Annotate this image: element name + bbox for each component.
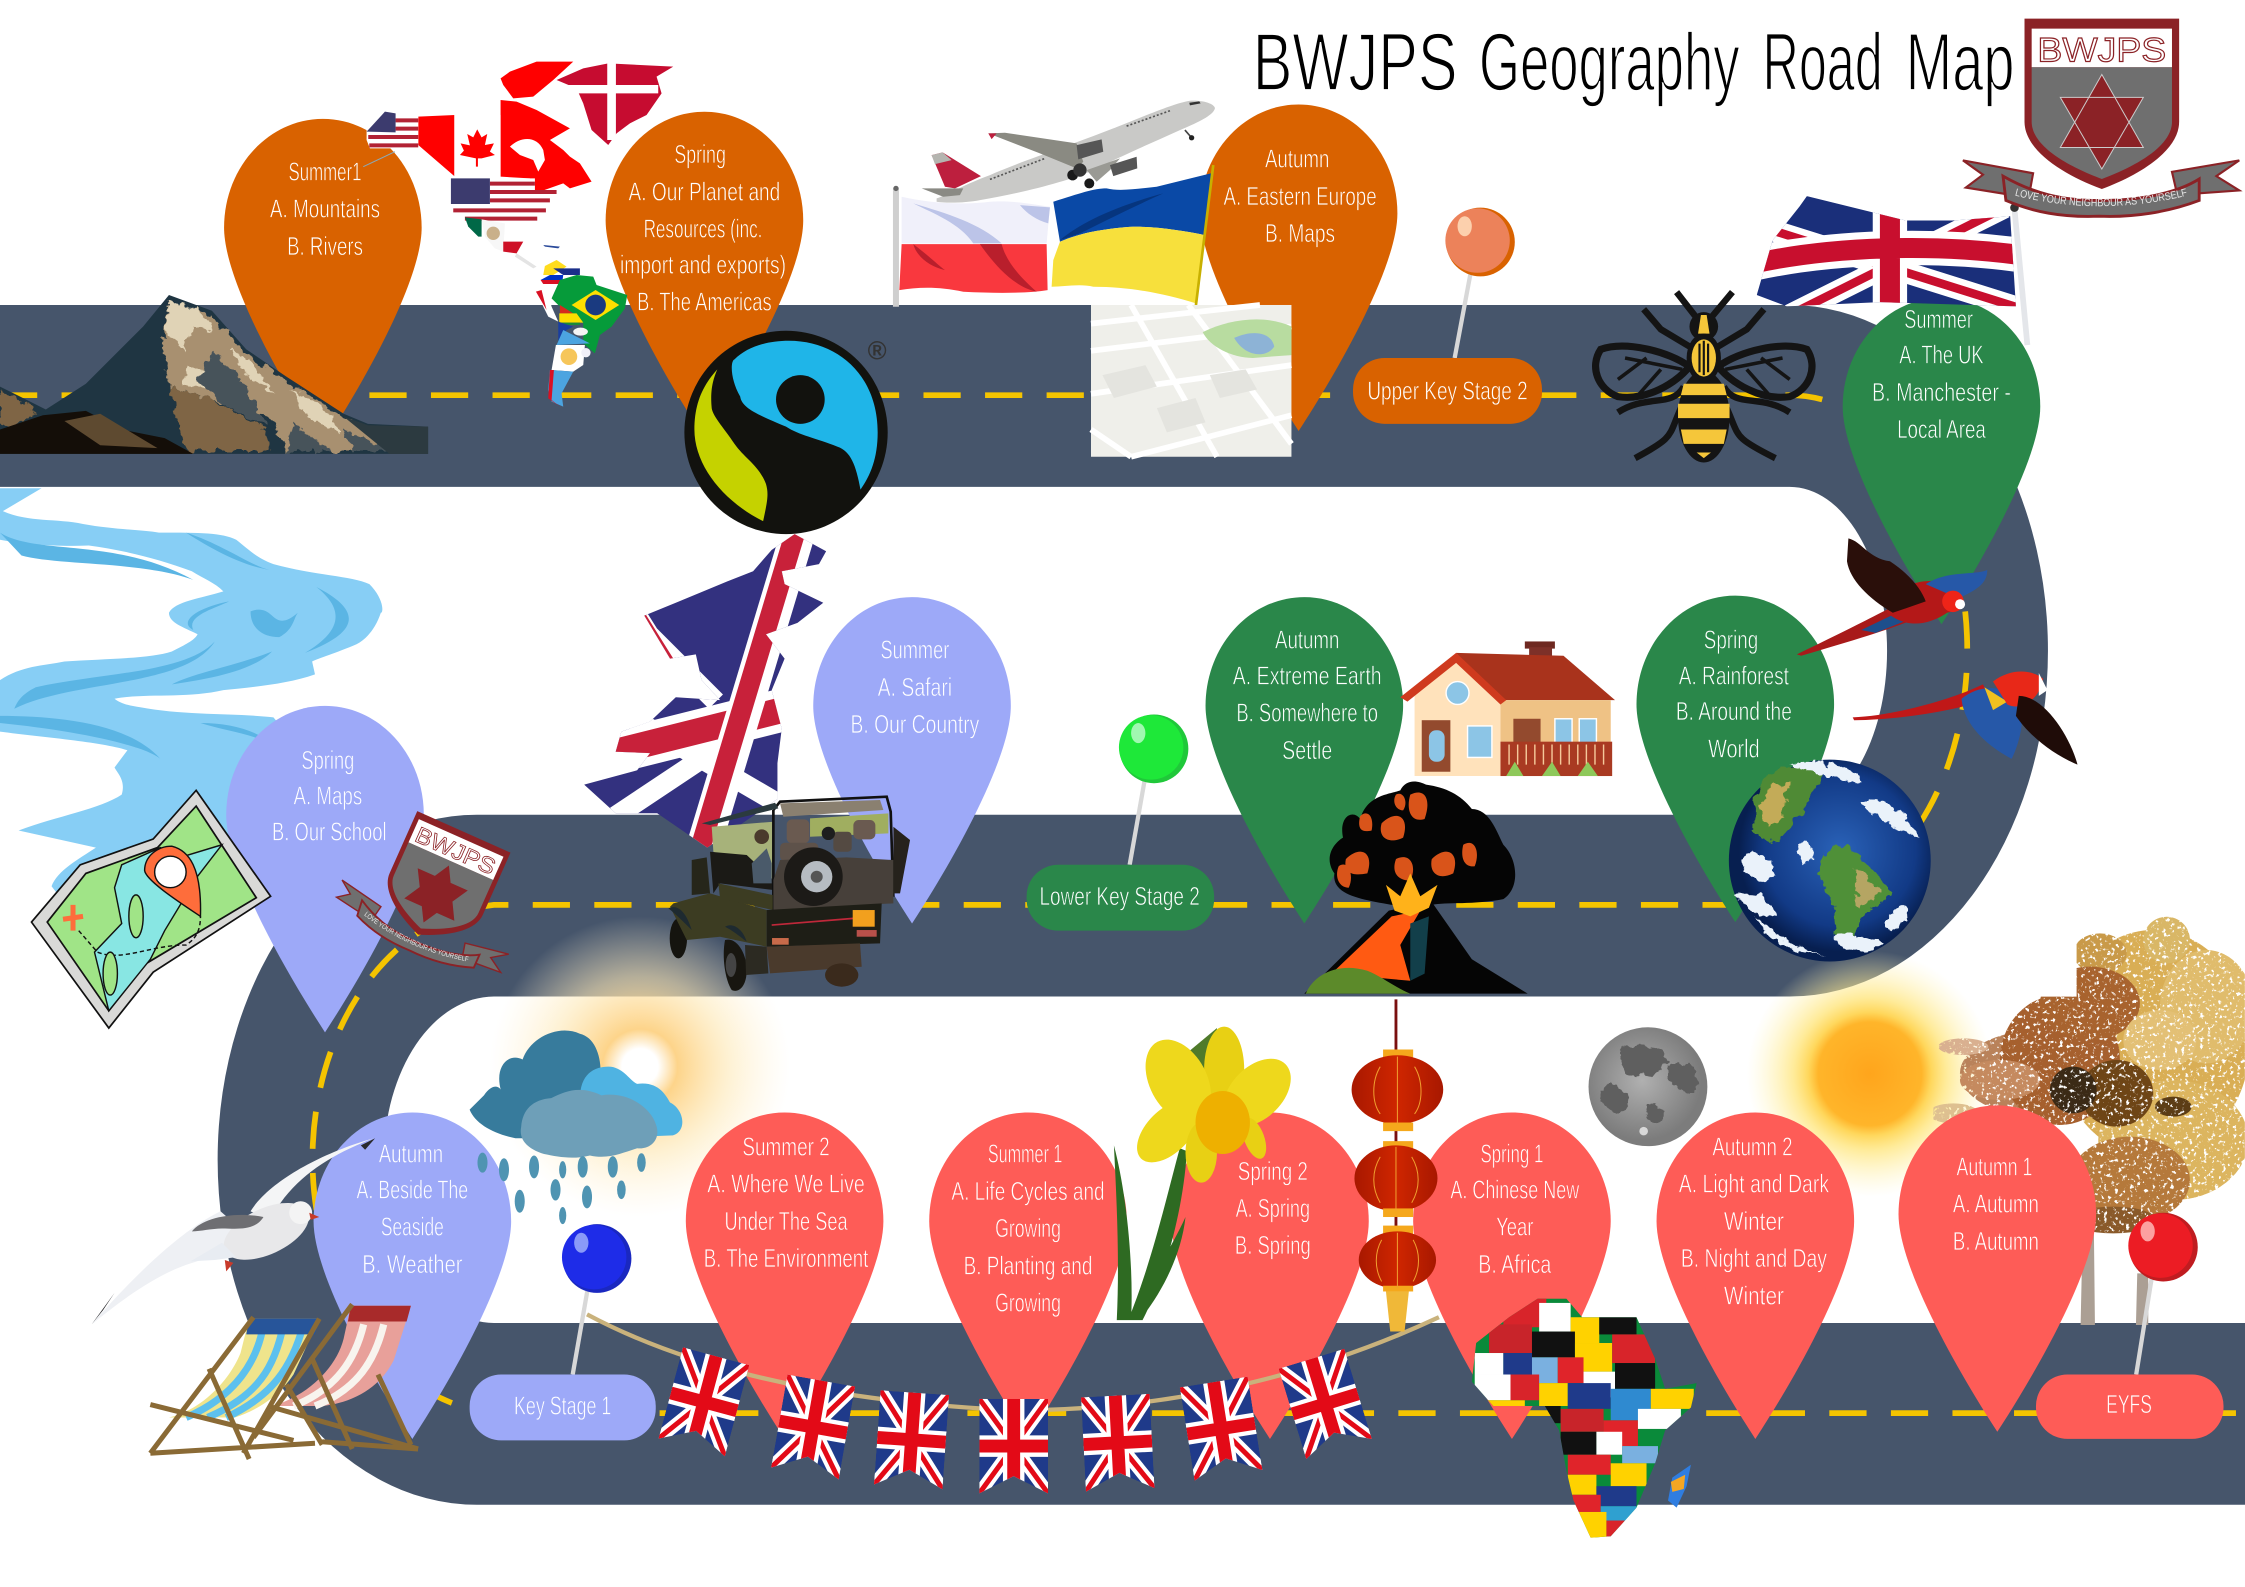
pin: Spring 1: Spring 1 [1480, 1141, 1543, 1169]
pin: Autumn Eastern Europe: Autumn [1265, 146, 1329, 174]
title: Map [1906, 17, 2014, 108]
label: Upper Key Stage 2 with pushpin: Upper Key Stage 2 [1367, 377, 1528, 405]
pin: Spring maps and school: Spring [301, 747, 354, 775]
pin: Autumn 2: Autumn 2 [1712, 1133, 1793, 1161]
icon: deckchairs [150, 1304, 418, 1459]
icon: raindrops [477, 1153, 646, 1224]
label: EYFS with pushpin: EYFS [2106, 1391, 2152, 1419]
icon: airplane [922, 101, 1215, 203]
pin: Spring planet and Americas: B. The Americas [637, 289, 772, 317]
label: Lower Key Stage 2 with pushpin: Lower Key Stage 2 [1039, 883, 1200, 911]
icon: school badge top right: BWJPS [2037, 32, 2166, 70]
pin: Summer the UK [1843, 298, 2040, 624]
pin: Spring 1: A. Chinese New [1450, 1176, 1579, 1204]
pin: Autumn extreme earth: B. Somewhere to [1236, 700, 1378, 728]
pin: Autumn Eastern Europe: A. Eastern Europe [1223, 183, 1377, 211]
pin: Summer 1 life cycles: A. Life Cycles and [951, 1178, 1105, 1206]
pin: Spring 2 [1171, 1112, 1369, 1439]
pin: Summer safari: A. Safari [878, 674, 952, 702]
pin: Summer 1 life cycles: B. Planting and [964, 1252, 1092, 1280]
icon: street map tile [1091, 305, 1291, 457]
road [0, 305, 2245, 1505]
title [1253, 17, 2014, 108]
icon: union flag on pole [1754, 193, 2027, 345]
pin: Autumn seaside: Autumn [379, 1141, 443, 1169]
label: Lower Key Stage 2 with pushpin [1027, 714, 1214, 931]
icon: mountain [0, 295, 428, 454]
icon: school badge rotated: LOVE YOUR NEIGHBOUR AS YOURSELF [364, 912, 469, 962]
icon: tree [1928, 917, 2245, 1325]
pin: Spring planet and Americas: A. Our Planet and [629, 178, 780, 206]
pin: Summer 2 [686, 1112, 883, 1439]
pin: Spring planet and Americas: Spring [674, 141, 726, 169]
pin: Autumn 2: A. Light and Dark [1679, 1171, 1829, 1199]
pin: Spring 1: Year [1496, 1214, 1534, 1242]
river [0, 488, 382, 931]
pin: Summer the UK: Summer [1904, 306, 1973, 334]
pin: Summer 1 life cycles: Growing [995, 1290, 1061, 1318]
pin: Summer safari: B. Our Country [850, 711, 979, 739]
icon: manchester bee [1596, 292, 1812, 462]
label: Upper Key Stage 2 with pushpin [1353, 208, 1542, 424]
icon: house [1400, 641, 1615, 776]
icon: school badge top right: LOVE YOUR NEIGHBOUR AS YOURSELF [2015, 188, 2186, 206]
pin: Autumn 1: Autumn 1 [1957, 1153, 2032, 1181]
icon: flag map of Africa [1468, 1296, 1704, 1546]
icon: school badge top right [1962, 18, 2242, 218]
pin: Summer 2: A. Where We Live [707, 1171, 865, 1199]
label: Key Stage 1 with pushpin: Key Stage 1 [514, 1393, 611, 1421]
title: Road [1762, 17, 1883, 108]
pin: Summer 1 mountains and rivers: Summer1 [288, 158, 362, 186]
pin: Spring maps and school [226, 706, 424, 1032]
title: BWJPS [1253, 17, 1458, 108]
pin: Summer the UK: Local Area [1897, 416, 1986, 444]
pin: Spring 2: B. Spring [1235, 1232, 1311, 1260]
pin: Summer 1 mountains and rivers: A. Mountains [270, 196, 380, 224]
pin: Summer 2: Summer 2 [742, 1133, 830, 1161]
pin: Summer 1 life cycles: Summer 1 [988, 1141, 1062, 1169]
icon: macaw flying upward [1797, 538, 1987, 656]
icon: moon [1589, 1027, 1707, 1146]
pin: Autumn 2 [1657, 1112, 1854, 1439]
pin: Spring maps and school: A. Maps [294, 783, 362, 811]
icon: flag map of the Americas [363, 60, 673, 407]
pin: Autumn extreme earth: Settle [1282, 737, 1332, 765]
pin: Spring 1 [1413, 1112, 1611, 1439]
icon: Fairtrade logo: ® [868, 337, 887, 365]
icon: chinese lanterns [1352, 999, 1443, 1332]
icon: daffodil [1114, 1027, 1304, 1320]
label: EYFS with pushpin [2036, 1213, 2224, 1439]
panel: sun glow [1747, 951, 1993, 1197]
icon: seagull [92, 1138, 375, 1324]
panel: sun glow behind cloud [490, 916, 790, 1217]
pin: Autumn 2: B. Night and Day [1681, 1245, 1827, 1273]
title: Geography [1479, 17, 1740, 108]
pin: Autumn seaside: B. Weather [362, 1251, 463, 1279]
pin: Autumn 2: Winter [1724, 1282, 1784, 1310]
pin: Spring 2: Spring 2 [1238, 1158, 1308, 1186]
pin: Summer 1 life cycles [929, 1112, 1127, 1439]
pin: Autumn seaside: Seaside [381, 1214, 444, 1242]
icon: Polish flag [893, 186, 1050, 307]
pin: Spring planet and Americas: Resources (inc. [644, 216, 762, 244]
pin: Spring 1: B. Africa [1478, 1251, 1552, 1279]
pin: Spring planet and Americas [606, 112, 803, 438]
icon: volcano [1304, 781, 1528, 994]
label: Key Stage 1 with pushpin [470, 1224, 656, 1440]
pin: Summer 1 life cycles: Growing [995, 1215, 1061, 1243]
pin: Autumn extreme earth [1206, 597, 1403, 924]
icon: rain cloud [470, 1030, 682, 1158]
pin: Autumn seaside: A. Beside The [357, 1176, 468, 1204]
pin: Spring 2: A. Spring [1236, 1195, 1310, 1223]
icon: school badge rotated [334, 811, 510, 974]
pin: Autumn extreme earth: A. Extreme Earth [1233, 662, 1382, 690]
pin: Autumn 1: A. Autumn [1953, 1191, 2039, 1219]
pin: Autumn 2: Winter [1724, 1208, 1784, 1236]
pin: Summer 2: Under The Sea [724, 1208, 848, 1236]
icon: macaw flying downward [1853, 672, 2077, 765]
icon: Fairtrade logo [684, 331, 888, 534]
icon: bunting rope [587, 1314, 1439, 1410]
icon: union flag shaped UK map [584, 534, 826, 848]
pin: Autumn extreme earth: Autumn [1275, 627, 1339, 655]
icon: safari jeep [668, 797, 910, 991]
icon: Ukrainian flag [1052, 165, 1213, 305]
pin: Summer 2: B. The Environment [704, 1245, 868, 1273]
icon: union flag bunting [658, 1347, 1372, 1493]
pin: Autumn Eastern Europe: B. Maps [1265, 220, 1335, 248]
icon: earth globe [1729, 760, 1931, 961]
pin: Spring rainforest: A. Rainforest [1679, 662, 1789, 690]
icon: school badge rotated: BWJPS [411, 821, 500, 880]
pin: Autumn Eastern Europe [1200, 105, 1397, 431]
icon: treasure map [31, 790, 271, 1028]
pin: Spring planet and Americas: import and exports) [620, 251, 786, 279]
pin: Autumn 1 [1899, 1105, 2096, 1432]
pin: Spring rainforest [1637, 596, 1834, 922]
pin: Summer 1 mountains and rivers [224, 119, 422, 445]
pin: Spring rainforest: World [1708, 735, 1760, 763]
pin: Spring maps and school: B. Our School [272, 818, 387, 846]
pin: Summer safari [813, 597, 1011, 924]
pin: Summer safari: Summer [881, 637, 950, 665]
pin: Spring rainforest: Spring [1704, 627, 1758, 655]
pin: Autumn 1: B. Autumn [1953, 1228, 2039, 1256]
pin: Summer 1 mountains and rivers: B. Rivers [287, 233, 363, 261]
pin: Summer the UK: A. The UK [1899, 342, 1984, 370]
pin: Summer the UK: B. Manchester - [1872, 379, 2011, 407]
pin: Autumn seaside [314, 1112, 511, 1439]
pin: Spring rainforest: B. Around the [1676, 698, 1792, 726]
